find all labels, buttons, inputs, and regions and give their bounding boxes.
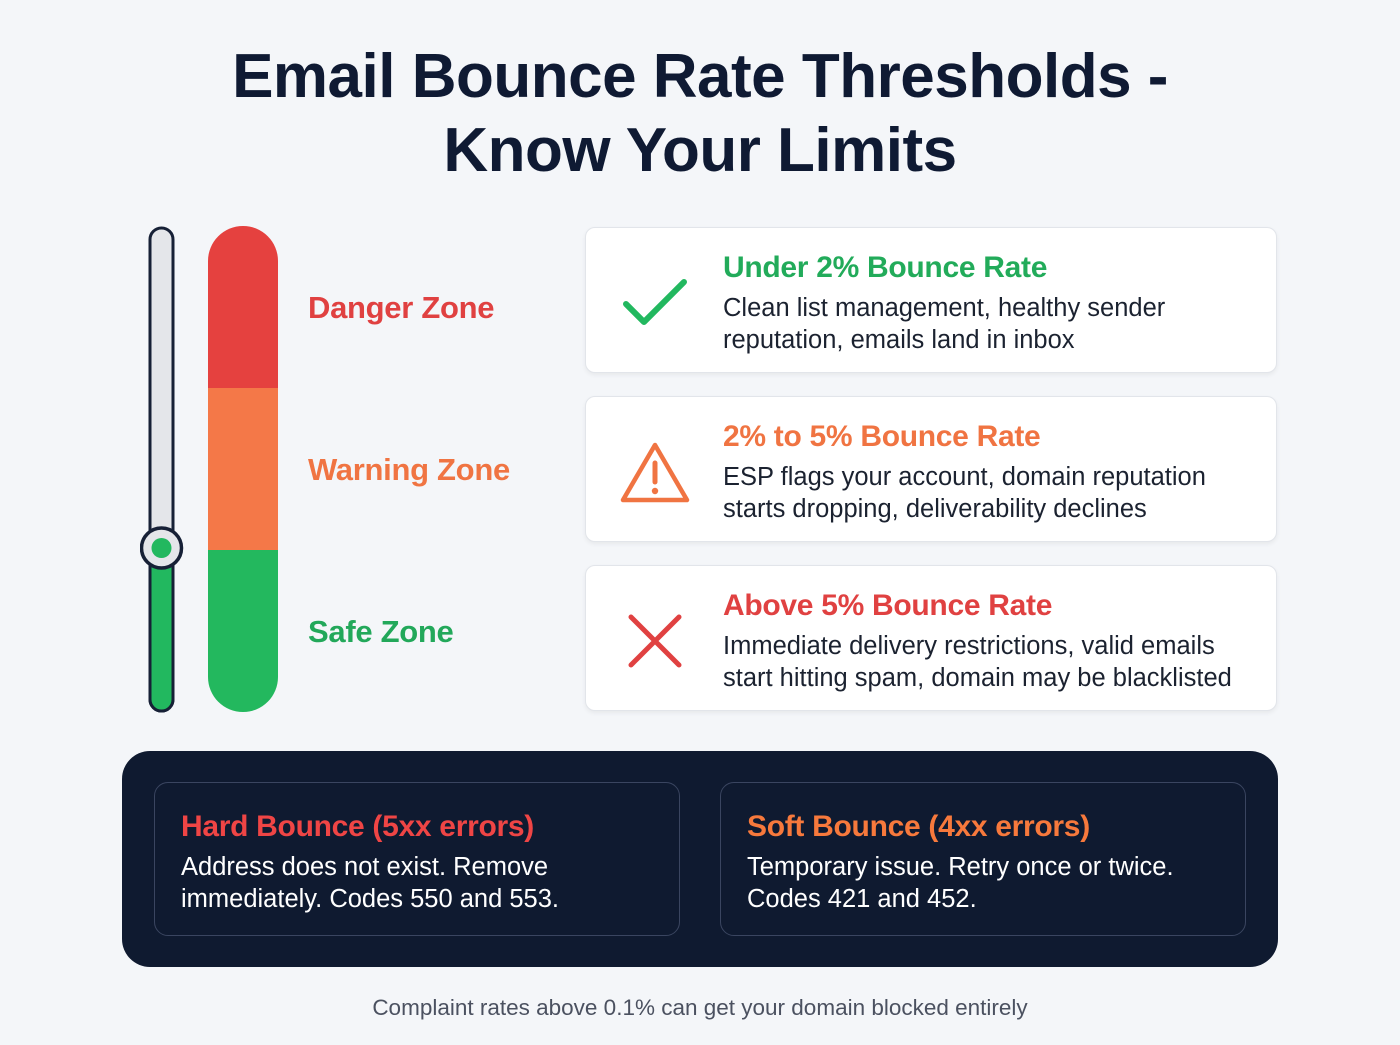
card: under 2%: Clean list management, healthy sender	[723, 294, 1165, 322]
title	[232, 42, 1168, 185]
label: danger zone: Danger Zone	[308, 290, 494, 325]
card: above 5%: start hitting spam, domain may be blacklisted	[723, 664, 1232, 692]
icon: warning	[620, 442, 690, 502]
card: under 2%	[585, 227, 1277, 373]
title: Email Bounce Rate Thresholds -	[232, 42, 1168, 111]
card: under 2%: reputation, emails land in inbox	[723, 326, 1075, 354]
box: soft bounce	[720, 782, 1246, 936]
title: Know Your Limits	[443, 116, 957, 185]
card: 2% to 5%: starts dropping, deliverability declines	[723, 495, 1147, 523]
card: 2% to 5%	[585, 396, 1277, 542]
label: warning zone: Warning Zone	[308, 452, 510, 487]
icon: cross	[628, 614, 682, 668]
slider	[140, 226, 184, 712]
card: above 5%: Above 5% Bounce Rate	[723, 589, 1052, 622]
box: hard bounce: immediately. Codes 550 and 553.	[181, 885, 559, 913]
box: soft bounce: Soft Bounce (4xx errors)	[747, 810, 1090, 843]
card: under 2%: Under 2% Bounce Rate	[723, 251, 1047, 284]
icon: check	[623, 279, 687, 325]
box: soft bounce: Temporary issue. Retry once or twice.	[747, 853, 1174, 881]
box: hard bounce: Hard Bounce (5xx errors)	[181, 810, 534, 843]
box: soft bounce: Codes 421 and 452.	[747, 885, 977, 913]
box: hard bounce: Address does not exist. Remove	[181, 853, 548, 881]
color bar	[208, 226, 278, 712]
label: safe zone: Safe Zone	[308, 614, 453, 649]
card: above 5%	[585, 565, 1277, 711]
card: 2% to 5%: 2% to 5% Bounce Rate	[723, 420, 1040, 453]
panel: bounce types	[122, 751, 1278, 967]
box: hard bounce	[154, 782, 680, 936]
card: 2% to 5%: ESP flags your account, domain reputation	[723, 463, 1206, 491]
footer note: Complaint rates above 0.1% can get your domain blocked entirely	[372, 995, 1028, 1020]
card: above 5%: Immediate delivery restrictions, valid emails	[723, 632, 1215, 660]
